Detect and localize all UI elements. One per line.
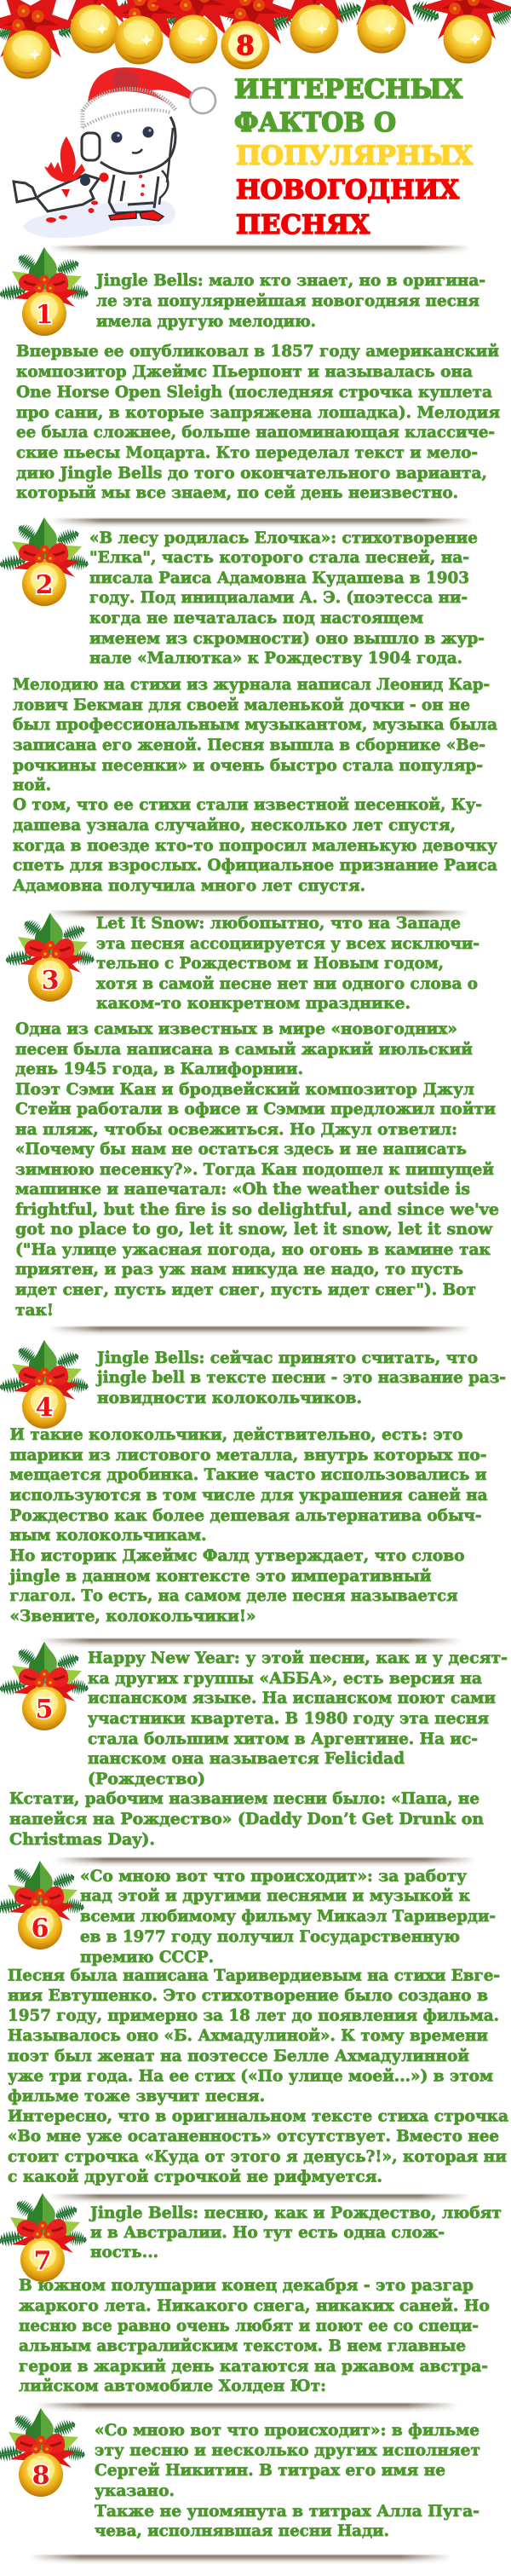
title: ПЕСНЯХ	[236, 210, 370, 240]
icon: ornament 6	[0, 1861, 85, 1949]
fact 5 body: Christmas Day).	[9, 1830, 155, 1849]
icon: ornament 3: 3	[42, 966, 59, 996]
fact 8 text: Также не упомянута в титрах Алла Пуга-	[95, 2502, 479, 2521]
title: ИНТЕРЕСНЫХ	[234, 74, 463, 105]
fact 1 body: дию Jingle Bells до того окончательного варианта,	[16, 464, 487, 482]
fact 1 heading: ле эта популярнейшая новогодняя песня	[96, 292, 479, 310]
icon: ornament 2	[0, 517, 89, 606]
icon: ornament 5: 5	[36, 1695, 53, 1724]
fact 3 body: Одна из самых известных в мире «новогодних»	[15, 1019, 457, 1038]
fact 7 body: жаркого лета. Никакого снега, никаких саней. Но	[19, 2296, 490, 2315]
fact 3 heading: хотя в самой песне нет ни одного слова о	[96, 974, 478, 993]
icon: ornament 4: 4	[36, 1393, 53, 1423]
fact 3 body: Поэт Сэми Кан и бродвейский композитор Джул	[15, 1080, 474, 1099]
fact 3 heading: Let It Snow: любопытно, что на Западе	[96, 914, 461, 933]
fact 4 body: шарики из листового металла, внутрь которых по-	[10, 1446, 487, 1464]
fact 1 body: про сани, в которые запряжена лошадка). Мелодия	[16, 403, 500, 422]
fact 7 body: В южном полушарии конец декабря - это разгар	[19, 2276, 474, 2295]
fact 1 heading: Jingle Bells: мало кто знает, но в оригина-	[95, 271, 485, 290]
title	[234, 74, 474, 240]
fact 5 heading: Happy New Year: у этой песни, как и у десят-	[88, 1649, 508, 1667]
fact 6 body: ния Евтушенко. Это стихотворение было создано в	[8, 1986, 488, 2005]
fact 7 heading	[89, 2203, 502, 2261]
fact 7 body: альным австралийским текстом. В нем главные	[19, 2336, 466, 2355]
fact 3 body: frightful, but the fire is so delightful, and since we've	[15, 1200, 499, 1219]
icon: ornament 3	[4, 913, 95, 1002]
fact 1 heading	[95, 271, 485, 331]
fact 4 heading: Jingle Bells: сейчас принято считать, что	[95, 1349, 478, 1367]
fact 6 heading	[80, 1867, 496, 1967]
fact 2 heading: именем из скромности) оно вышло в жур-	[89, 629, 485, 648]
fact 6 heading: «Со мною вот что происходит»: за работу	[80, 1867, 467, 1886]
fact 1 body: One Horse Open Sleigh (последняя строчка куплета	[16, 383, 492, 401]
fact 4 heading: jingle bell в тексте песни - это название раз-	[95, 1368, 506, 1387]
fact 2 body: О том, что ее стихи стали известной песенкой, Ку-	[13, 795, 482, 814]
fact 4 body: ным колокольчикам.	[10, 1526, 206, 1545]
mascot: child in Santa hat with reindeer	[14, 67, 215, 238]
fact 1 body: который мы все знаем, по сей день неизвестно.	[16, 483, 458, 502]
fact 6 body: Интересно, что в оригинальном тексте стиха строчка	[8, 2107, 508, 2126]
fact 1 body	[16, 342, 500, 502]
icon: ornament 7: 7	[34, 2246, 51, 2276]
fact 2 body: записана его женой. Песня вышла в сборнике «Ве-	[13, 736, 485, 754]
fact 2 heading: «В лесу родилась Елочка»: стихотворение	[89, 528, 478, 547]
fact 7 heading: ность...	[90, 2243, 158, 2261]
icon: ornament 6: 6	[32, 1914, 49, 1944]
panel: fact 1	[0, 247, 500, 502]
fact 3 body: зимнюю песенку?». Тогда Кан подошел к пишущей	[15, 1160, 494, 1179]
fact 3 body: на пляж, чтобы освежиться. Но Джул ответил:	[15, 1120, 457, 1139]
icon: ornament 1	[0, 247, 89, 336]
icon: ornament 4	[0, 1340, 89, 1429]
header garland with golden balls	[0, 0, 511, 78]
fact 5 heading: (Рождество)	[88, 1770, 205, 1788]
fact 5 heading: стала большим хитом в Аргентине. На ис-	[88, 1730, 478, 1748]
title: ПОПУЛЯРНЫХ	[236, 141, 474, 171]
icon: ornament 1: 1	[36, 300, 53, 330]
panel: fact 8	[0, 2408, 480, 2540]
fact 1 body: композитор Джеймс Пьерпонт и называлась она	[16, 362, 473, 381]
fact 4 body: мещается дробинка. Такие часто использовались и	[10, 1465, 487, 1484]
panel: fact 5	[0, 1642, 508, 1849]
fact 5 heading: испанском языке. На испанском поют сами	[88, 1689, 496, 1707]
fact 2 heading: писала Раиса Адамовна Кудашева в 1903	[89, 569, 469, 587]
fact 6 heading: всеми любимому фильму Микаэл Тариверди-	[80, 1907, 496, 1926]
icon: ornament 5	[0, 1642, 89, 1730]
fact 2 heading: когда не печаталась под настоящем	[89, 609, 423, 627]
fact 8 text: Сергей Никитин. В титрах его имя не	[95, 2461, 445, 2480]
fact 2 body: спеть для взрослых. Официальное признание Раиса	[13, 856, 497, 875]
fact 2 body: Мелодию на стихи из журнала написал Леонид Кар-	[13, 675, 490, 694]
fact 4 body: Но историк Джеймс Фалд утверждает, что слово	[10, 1546, 465, 1565]
fact 5 heading: панском она называется Felicidad	[88, 1749, 405, 1768]
title: ФАКТОВ О	[234, 107, 396, 138]
fact 8 text: чева, исполнявшая песни Нади.	[95, 2521, 389, 2540]
fact 2 body: когда в поезде кто-то попросил маленькую девочку	[13, 836, 497, 855]
fact 6 heading: ев в 1977 году получил Государственную	[80, 1927, 460, 1946]
fact 6 body: уже три года. На ее стих («По улице моей...») в этом	[8, 2066, 493, 2085]
fact 3 heading: эта песня ассоциируется у всех исключи-	[96, 934, 479, 953]
fact 6 body: Называлось оно «Б. Ахмадулиной». К тому времени	[8, 2026, 488, 2045]
fact 2 heading: "Елка", часть которого стала песней, на-	[89, 548, 469, 567]
title: НОВОГОДНИХ	[236, 175, 460, 205]
fact 4 body: глагол. То есть, на самом деле песня называется	[10, 1586, 458, 1605]
fact 4 heading: новидности колокольчиков.	[97, 1389, 362, 1407]
fact 4 body: И такие колокольчики, действительно, есть: это	[10, 1425, 463, 1444]
fact 2 heading: нале «Малютка» к Рождеству 1904 года.	[89, 649, 462, 667]
fact 7 body: песню все равно очень любят и поют ее со специ-	[19, 2317, 479, 2336]
fact 7 body: герои в жаркий день катаются на ржавом австра-	[19, 2357, 488, 2376]
fact 2 body: был профессиональным музыкантом, музыка была	[13, 715, 497, 734]
fact 2 heading: году. Под инициалами А. Э. (поэтесса ни-	[89, 588, 468, 607]
fact 7 body	[19, 2276, 490, 2395]
fact 3 body: got no place to go, let it snow, let it snow, let it snow	[15, 1220, 493, 1239]
fact 5 heading: ка других группы «АББА», есть версия на	[88, 1669, 482, 1688]
fact 4 body: «Звените, колокольчики!»	[10, 1607, 256, 1626]
fact 4 body: Рождество как более дешевая альтернатива обыч-	[10, 1506, 482, 1525]
fact 4 body: jingle в данном контексте это императивный	[9, 1567, 432, 1585]
fact 4 body: используются в том числе для украшения саней на	[10, 1486, 487, 1505]
fact 3 body: идет снег, пусть идет снег, пусть идет снег"). Вот	[15, 1280, 476, 1299]
fact 3 body: день 1945 года, в Калифорнии.	[15, 1060, 303, 1078]
fact 3 body: машинке и напечатал: «Oh the weather outside is	[15, 1180, 470, 1198]
fact 2 body: рочкины песенки» и очень быстро стала популяр-	[13, 756, 483, 775]
fact 3 heading: тельно с Рождеством и Новым годом,	[96, 954, 444, 973]
fact 6 body: Песня была написана Тариверди­евым на стихи Евге-	[8, 1966, 500, 1984]
fact 3 body: песен была написана в самый жаркий июльский	[15, 1040, 473, 1059]
panel: fact 3	[4, 913, 499, 1320]
fact 2 body: ной.	[13, 776, 51, 794]
fact 3 body	[15, 1019, 499, 1320]
fact 5 body: напейся на Рождество» (Daddy Don’t Get Drunk on	[9, 1810, 484, 1828]
fact 6 body: «Во мне уже осатаненность» отсутствует. Вместо нее	[8, 2127, 499, 2146]
icon: ornament 8	[0, 2408, 86, 2497]
fact 5 heading	[88, 1649, 508, 1788]
fact 6 body: стоит строчка «Куда от этого я денусь?!», которая ни	[8, 2147, 507, 2166]
fact 8 text: указано.	[95, 2481, 175, 2500]
fact 1 body: ские пьесы Моцарта. Кто переделал текст и мело-	[16, 443, 478, 462]
fact 3 body: «Почему бы нам не остаться здесь и не написать	[15, 1140, 467, 1158]
fact 8 text: «Со мною вот что происходит»: в фильме	[95, 2421, 479, 2440]
fact 4 heading	[95, 1349, 506, 1407]
fact 2 heading	[89, 528, 485, 667]
fact 6 body: фильме тоже звучит песня.	[8, 2087, 265, 2105]
fact 6 heading: премию СССР.	[80, 1948, 214, 1967]
fact 8 text	[95, 2421, 480, 2540]
header garland with golden balls: 8	[236, 31, 255, 61]
fact 3 body: Стейн работали в офисе и Сэмми предложил пойти	[15, 1100, 496, 1118]
fact 5 heading: участники квартета. В 1980 году эта песня	[88, 1709, 489, 1728]
fact 4 body	[9, 1425, 488, 1626]
fact 3 heading	[96, 914, 479, 1013]
fact 8 text: эту песню и несколько других исполняет	[95, 2441, 480, 2460]
fact 3 heading: каком-то конкретном празднике.	[96, 994, 411, 1013]
fact 3 body: приятен, и раз уж нам никуда не надо, то пусть	[15, 1260, 463, 1279]
fact 3 body: ("На улице ужасная погода, но огонь в камине так	[15, 1240, 491, 1259]
fact 2 body: Адамовна получила много лет спустя.	[13, 876, 365, 895]
fact 2 body: дашева узнала случайно, несколько лет спустя,	[13, 816, 456, 835]
fact 7 heading: и в Австралии. Но тут есть одна слож-	[90, 2223, 445, 2242]
fact 6 body: с какой другой строчкой не рифмуется.	[8, 2167, 382, 2186]
fact 6 body: 1957 году, примерно за 18 лет до появления фильма.	[8, 2007, 499, 2025]
fact 6 heading: над этой и другими песнями и музыкой к	[80, 1886, 470, 1905]
fact 2 body: лович Бекман для своей маленькой дочки - он не	[13, 696, 470, 714]
icon: ornament 8: 8	[32, 2461, 49, 2491]
fact 7 heading: Jingle Bells: песню, как и Рождество, любят	[89, 2203, 502, 2222]
fact 5 body	[9, 1789, 484, 1849]
fact 6 body	[8, 1966, 508, 2186]
panel: fact 2	[0, 517, 497, 895]
fact 3 body: так!	[15, 1301, 54, 1320]
panel: fact 6	[0, 1861, 508, 2186]
panel: fact 4	[0, 1340, 506, 1626]
fact 7 body: лийском автомобиле Холден Ют:	[19, 2377, 326, 2395]
fact 1 heading: имела другую мелодию.	[96, 312, 316, 331]
fact 2 body	[13, 675, 497, 895]
fact 1 body: ее была сложнее, больше напоминающая классиче-	[16, 423, 495, 442]
panel: fact 7	[0, 2193, 502, 2395]
fact 1 body: Впервые ее опубликовал в 1857 году американский	[16, 342, 499, 361]
fact 6 body: поэт был женат на поэтессе Белле Ахмадулинной	[8, 2047, 469, 2065]
icon: ornament 2: 2	[36, 570, 53, 600]
fact 5 body: Кстати, рабочим названием песни было: «Папа, не	[9, 1789, 479, 1808]
icon: ornament 7	[0, 2193, 88, 2282]
